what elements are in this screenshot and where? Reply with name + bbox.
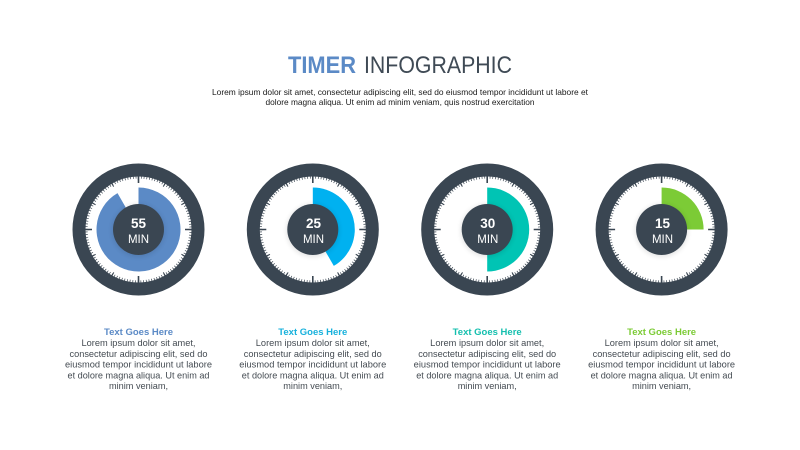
- intro text: [212, 87, 589, 107]
- hub label: 55 min: MIN: [128, 234, 149, 246]
- text block: column 3: minim veniam,: [458, 381, 517, 391]
- progress arc: 30 min: [487, 188, 529, 272]
- text block: column 3: Text Goes Here: [453, 326, 522, 337]
- hub label: 55 min: 55: [131, 216, 146, 231]
- text block: column 3: Lorem ipsum dolor sit amet,: [430, 338, 544, 348]
- text block: column 4: Text Goes Here: [627, 326, 696, 337]
- text block: column 3: eiusmod tempor incididunt ut labore: [414, 360, 561, 370]
- progress arc: 55 min: [97, 188, 181, 272]
- text block: column 1: consectetur adipiscing elit, sed do: [70, 349, 208, 359]
- timer: 30 min: [423, 165, 552, 294]
- text block: column 1: Text Goes Here: [104, 326, 173, 337]
- text block: column 4: consectetur adipiscing elit, sed do: [593, 349, 731, 359]
- title: TIMER: [288, 52, 356, 79]
- hub label: 30 min: [477, 216, 498, 246]
- timer: 15 min: [597, 165, 726, 294]
- intro text: Lorem ipsum dolor sit amet, consectetur adipiscing elit, sed do eiusmod tempor incididunt ut labore et: [212, 87, 589, 97]
- timer: 55 min: [74, 165, 203, 294]
- hub label: 25 min: [303, 216, 324, 246]
- text block: column 2: eiusmod tempor incididunt ut labore: [239, 360, 386, 370]
- text block: column 1: [65, 326, 212, 391]
- text block: column 2: consectetur adipiscing elit, sed do: [244, 349, 382, 359]
- title: [288, 52, 512, 79]
- hub label: 15 min: MIN: [652, 234, 673, 246]
- text block: column 2: Lorem ipsum dolor sit amet,: [256, 338, 370, 348]
- intro text: dolore magna aliqua. Ut enim ad minim veniam, quis nostrud exercitation: [266, 97, 535, 107]
- text block: column 3: et dolore magna aliqua. Ut enim ad: [416, 370, 558, 380]
- text block: column 4: minim veniam,: [632, 381, 691, 391]
- hub label: 30 min: MIN: [477, 234, 498, 246]
- progress arc: 15 min: [662, 188, 704, 230]
- text block: column 3: consectetur adipiscing elit, sed do: [418, 349, 556, 359]
- hub label: 55 min: [128, 216, 149, 246]
- hub label: 15 min: [652, 216, 673, 246]
- hub label: 15 min: 15: [655, 216, 670, 231]
- text block: column 1: minim veniam,: [109, 381, 168, 391]
- text block: column 2: minim veniam,: [283, 381, 342, 391]
- text block: column 4: et dolore magna aliqua. Ut enim ad: [591, 370, 733, 380]
- text block: column 2: Text Goes Here: [278, 326, 347, 337]
- text block: column 4: eiusmod tempor incididunt ut labore: [588, 360, 735, 370]
- timer: 25 min: [248, 165, 377, 294]
- progress arc: 25 min: [313, 188, 355, 266]
- text block: column 2: [239, 326, 386, 391]
- text block: column 1: eiusmod tempor incididunt ut labore: [65, 360, 212, 370]
- hub label: 25 min: MIN: [303, 234, 324, 246]
- text block: column 1: Lorem ipsum dolor sit amet,: [82, 338, 196, 348]
- hub label: 30 min: 30: [480, 216, 495, 231]
- title: INFOGRAPHIC: [364, 52, 512, 79]
- text block: column 4: [588, 326, 735, 391]
- text block: column 1: et dolore magna aliqua. Ut enim ad: [68, 370, 210, 380]
- hub label: 25 min: 25: [306, 216, 321, 231]
- text block: column 3: [414, 326, 561, 391]
- text block: column 2: et dolore magna aliqua. Ut enim ad: [242, 370, 384, 380]
- text block: column 4: Lorem ipsum dolor sit amet,: [605, 338, 719, 348]
